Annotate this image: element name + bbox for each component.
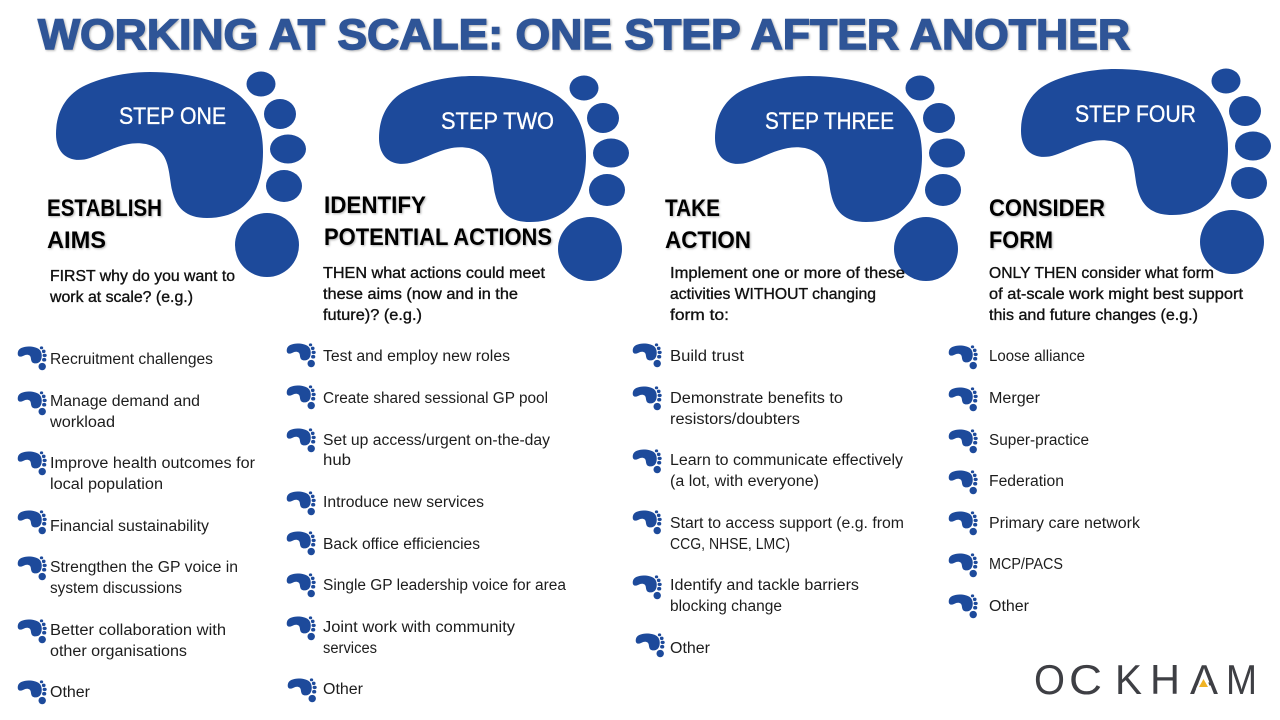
heading: take action [665, 195, 751, 254]
intro text step three [670, 265, 905, 324]
list: step two actions: Create shared sessional GP pool [323, 390, 548, 407]
intro text step four [989, 265, 1244, 324]
list: step one aims: Better collaboration with [50, 622, 226, 639]
list: step three activities: Identify and tackle barriers [670, 577, 859, 594]
list: step two actions: Other [323, 681, 363, 698]
step three label: STEP THREE [765, 108, 894, 135]
list: step two actions: Back office efficiencies [323, 536, 480, 553]
step two label: STEP TWO [441, 108, 554, 135]
heading: identify potential actions [324, 192, 552, 251]
intro text step four: of at-scale work might best support [989, 286, 1244, 303]
intro text step three: form to: [670, 307, 729, 324]
list: step one aims: Other [50, 684, 90, 701]
list: step one aims: Improve health outcomes for [50, 455, 255, 472]
logo: ockham [1034, 656, 1257, 703]
intro text step three: Implement one or more of these [670, 265, 905, 282]
list: step two actions: Set up access/urgent on-the-day [323, 432, 550, 449]
list: step three activities: Learn to communicate effectively [670, 452, 903, 469]
list: step three activities: Demonstrate benefits to [670, 390, 843, 407]
list: step two actions: Joint work with community [323, 619, 515, 636]
list: step four forms: Primary care network [989, 515, 1140, 532]
list: step four forms: Loose alliance [989, 348, 1085, 365]
heading: identify potential actions: POTENTIAL ACTIONS [324, 224, 552, 251]
list: step three activities [633, 343, 904, 657]
icon: large footprint step one [56, 72, 306, 277]
list: step one aims: Recruitment challenges [50, 351, 213, 368]
list: step two actions: Introduce new services [323, 494, 484, 511]
intro text step one: work at scale? (e.g.) [49, 289, 193, 306]
list: step one aims: other organisations [50, 643, 187, 660]
intro text step one [49, 268, 235, 306]
icon: large footprint step three [715, 76, 965, 281]
list: step one aims: system discussions [50, 580, 182, 597]
list: step two actions [287, 343, 566, 702]
intro text step two: future)? (e.g.) [323, 307, 422, 324]
logo: ockham: C [1069, 656, 1102, 703]
heading: establish aims [47, 195, 162, 254]
intro text step two [323, 265, 546, 324]
list: step three activities: (a lot, with everyone) [670, 473, 819, 490]
list: step one aims: Financial sustainability [50, 518, 209, 535]
intro text step two: these aims (now and in the [323, 286, 518, 303]
intro text step four: ONLY THEN consider what form [989, 265, 1214, 282]
heading: consider form: CONSIDER [989, 195, 1105, 222]
intro text step four: this and future changes (e.g.) [989, 307, 1198, 324]
panel: step four [949, 68, 1271, 618]
list: step three activities: Build trust [670, 348, 745, 365]
heading: consider form [989, 195, 1105, 254]
intro text step two: THEN what actions could meet [323, 265, 546, 282]
logo: ockham: O [1034, 656, 1065, 703]
step four label: STEP FOUR [1075, 101, 1196, 128]
heading: take action: ACTION [665, 227, 751, 254]
intro text step one: FIRST why do you want to [50, 268, 235, 285]
list: step four forms: Other [989, 598, 1029, 615]
list: step four forms [949, 345, 1140, 618]
list: step four forms: Federation [989, 473, 1064, 490]
heading: establish aims: AIMS [47, 227, 106, 254]
list: step one aims: workload [49, 414, 115, 431]
title: WORKING AT SCALE: ONE STEP AFTER ANOTHER [38, 11, 1130, 59]
list: step three activities: CCG, NHSE, LMC) [670, 536, 790, 553]
logo: ockham: A [1190, 656, 1218, 703]
list: step one aims [18, 346, 255, 704]
list: step two actions: Single GP leadership voice for area [323, 577, 566, 594]
logo: ockham: K [1115, 656, 1142, 703]
list: step three activities: blocking change [670, 598, 782, 615]
list: step four forms: Merger [989, 390, 1040, 407]
list: step four forms: MCP/PACS [989, 556, 1063, 573]
panel: step two [287, 76, 629, 702]
list: step one aims: Strengthen the GP voice in [50, 559, 238, 576]
heading: consider form: FORM [989, 227, 1053, 254]
heading: take action: TAKE [665, 195, 720, 222]
icon: large footprint step two [379, 76, 629, 281]
logo: ockham: M [1226, 656, 1257, 703]
list: step one aims: local population [50, 476, 163, 493]
heading: establish aims: ESTABLISH [47, 195, 162, 222]
list: step two actions: services [323, 640, 377, 657]
list: step three activities: Other [670, 640, 710, 657]
logo: ockham: H [1150, 656, 1180, 703]
list: step one aims: Manage demand and [50, 393, 200, 410]
list: step three activities: Start to access support (e.g. from [670, 515, 904, 532]
panel: step three [633, 76, 965, 657]
intro text step three: activities WITHOUT changing [670, 286, 876, 303]
panel: step one [18, 72, 306, 704]
list: step two actions: hub [323, 452, 351, 469]
list: step two actions: Test and employ new roles [323, 348, 510, 365]
list: step four forms: Super-practice [989, 432, 1089, 449]
icon: large footprint step four [1021, 68, 1271, 274]
list: step three activities: resistors/doubters [670, 411, 800, 428]
step one label: STEP ONE [119, 103, 226, 130]
heading: identify potential actions: IDENTIFY [324, 192, 426, 219]
